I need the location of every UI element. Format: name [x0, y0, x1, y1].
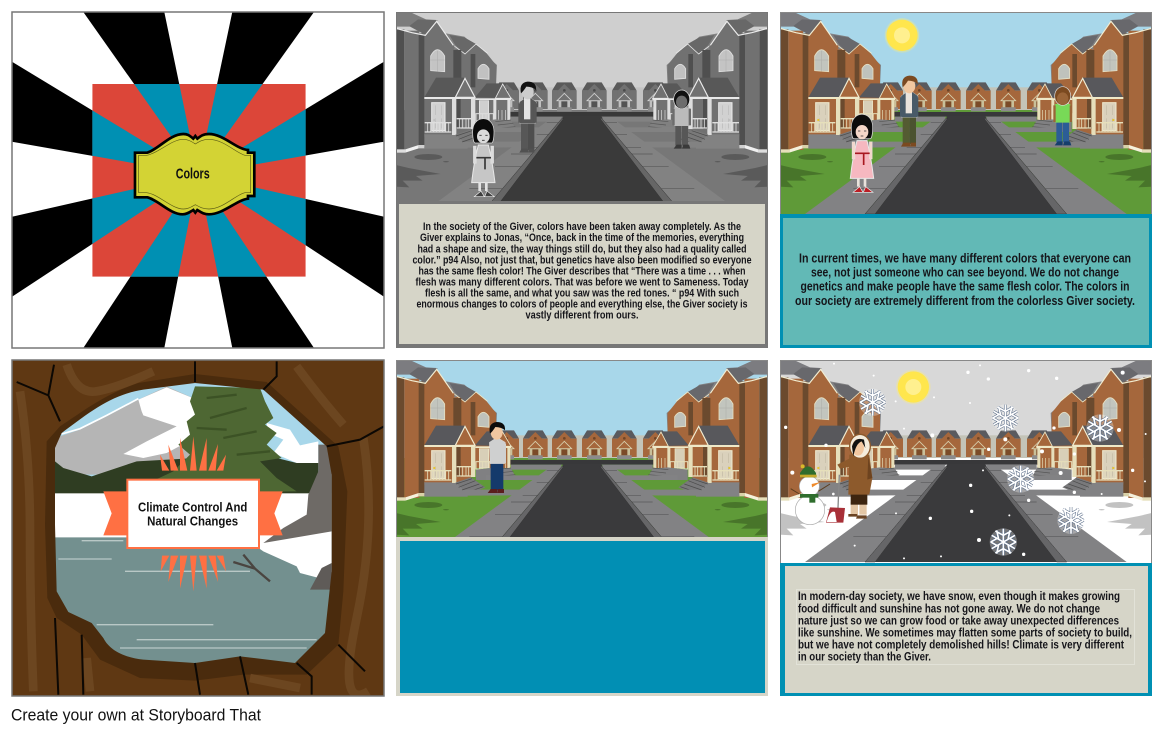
panel: modern snowy society [780, 358, 1152, 696]
text box: Giver society colors: has the same flesh color! The Giver describes that “There was a time . . . when [418, 265, 746, 277]
text box: modern climate: In modern-day society, we have snow, even though it makes growing [798, 591, 1120, 603]
banner: climate control heading: Climate Control And [138, 499, 247, 514]
snowman [791, 464, 830, 525]
icon: sun [896, 370, 931, 404]
text box: modern climate [780, 563, 1152, 696]
scene: colorful street [781, 13, 1151, 214]
shovel [826, 475, 845, 523]
footer credit text: Create your own at Storyboard That [11, 706, 261, 724]
text box: Giver society colors: enormous changes to colors of people and everything else, the Giver society is [416, 298, 748, 310]
banner: climate control heading: Natural Changes [147, 514, 238, 529]
panel: modern colorful society [780, 10, 1152, 348]
scene: man on colorful street [397, 361, 767, 537]
black and white sunburst [12, 12, 384, 348]
person in parka [837, 434, 872, 519]
text box: modern climate: food difficult and sunshine has not gone away. We do not change [798, 603, 1100, 615]
text box: Giver society colors: flesh was many different colors. That was before we went to Sameness. Today [416, 276, 749, 288]
panel: grayscale Giver society [396, 10, 768, 348]
badge: colors label [135, 134, 254, 214]
text box: Giver society colors: In the society of the Giver, colors have been taken away completely. As the [423, 221, 741, 233]
falling snow dots [784, 363, 1147, 559]
panel: empty blue text panel [396, 358, 768, 696]
banner: climate control heading [103, 436, 283, 591]
scene: snowy street [781, 361, 1151, 563]
colored red and blue square [92, 84, 306, 277]
panel: colors title [12, 12, 384, 348]
panel: climate control title [10, 358, 387, 698]
icon: sun [885, 18, 919, 53]
scene: lake and mountain view [10, 358, 387, 698]
text box: Giver society colors: had a shape and size, the way things still do, but they also had a quality called [418, 243, 746, 255]
blue text box [396, 537, 768, 696]
text box: Giver society colors: Giver explains to Jonas, “Once, back in the time of the memories, everything [420, 232, 744, 244]
text box: Giver society colors: flesh is all the same, and what you saw was the red tones. “ p94 With such [425, 287, 739, 299]
text box: Giver society colors: vastly different from ours. [526, 309, 638, 321]
text box: current colors [780, 214, 1152, 348]
heading: colors: Colors [176, 166, 210, 182]
text box: modern climate: in our society than the Giver. [798, 652, 931, 664]
scene: colorless street [397, 13, 767, 201]
text box: Giver society colors: color.” p94 Also, not just that, but genetics have also been modified so everyone [412, 254, 752, 266]
brown tree hollow frame [10, 358, 387, 698]
icons: large snowflakes [859, 389, 1114, 556]
text box: Giver society colors [399, 204, 765, 344]
